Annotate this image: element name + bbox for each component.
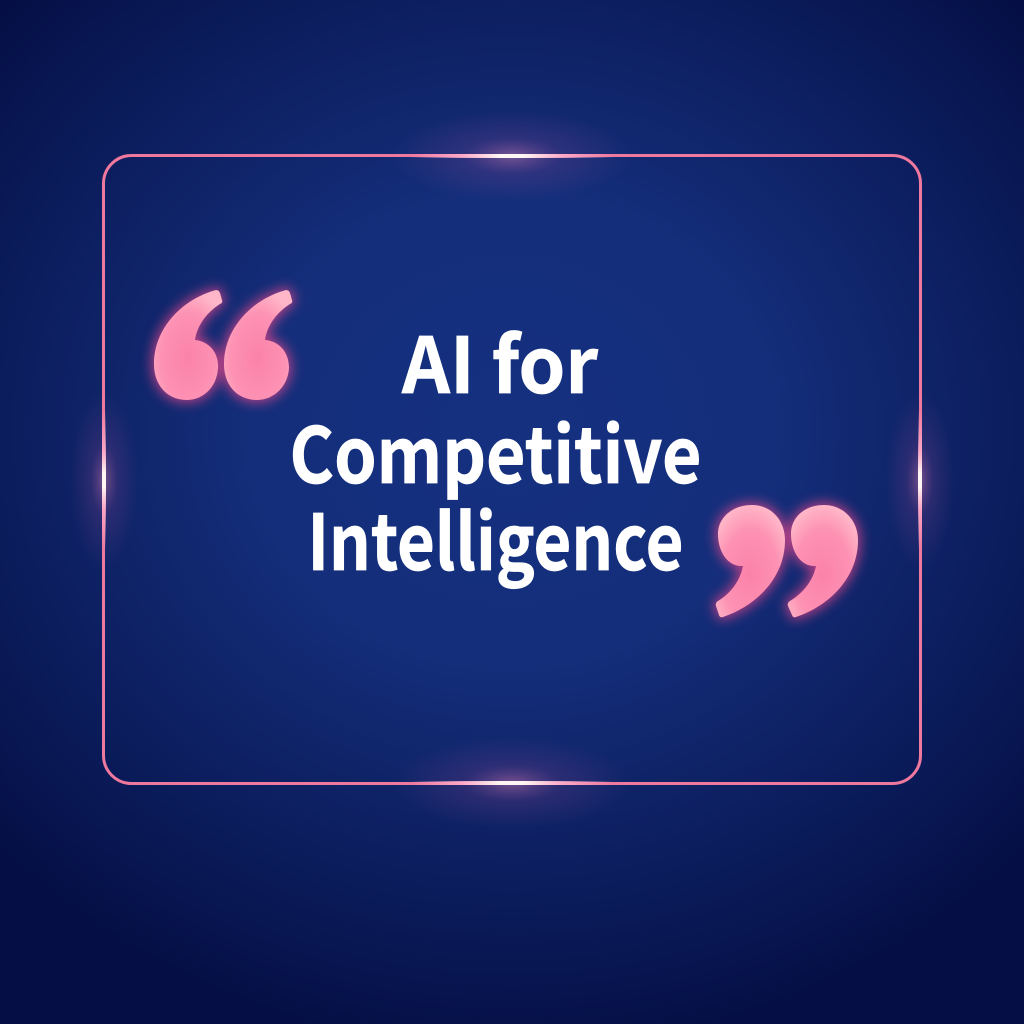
title	[290, 305, 702, 593]
title: Competitive	[290, 395, 702, 506]
icon: closing quotation mark	[716, 505, 858, 617]
title: Intelligence	[308, 482, 684, 593]
icon: opening quotation mark	[154, 290, 292, 400]
frame	[70, 110, 954, 829]
title: AI for	[401, 305, 598, 416]
